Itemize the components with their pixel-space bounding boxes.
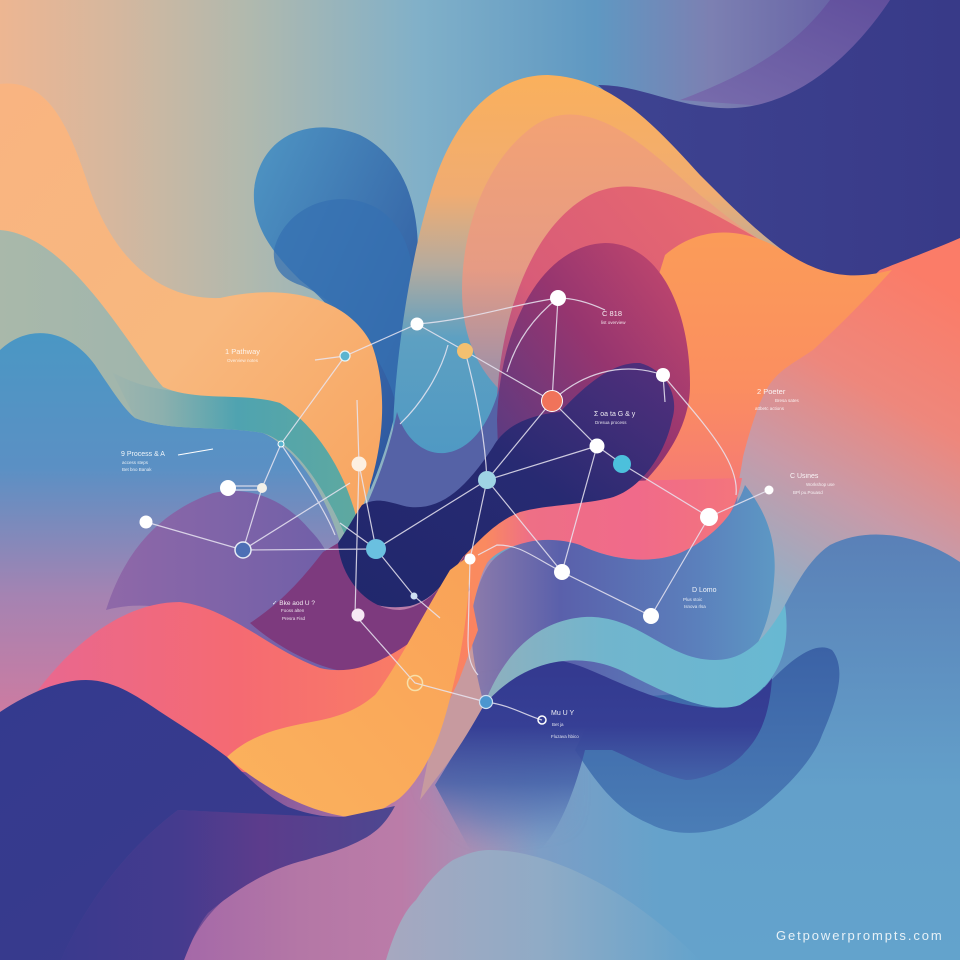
- left blue field: [0, 333, 420, 720]
- watermark: Getpowerprompts.com: [776, 928, 944, 943]
- node: [550, 290, 566, 306]
- network nodes: [140, 290, 774, 724]
- cyan band: [484, 605, 787, 708]
- navy lobe: [435, 660, 772, 850]
- node: [410, 318, 424, 330]
- node: [464, 554, 476, 564]
- node: [366, 539, 386, 559]
- node: [257, 483, 267, 493]
- label: right upper: 2 Poeter: [757, 387, 786, 396]
- label: lower left: ✓ Bke aod U ?: [272, 600, 315, 607]
- label: bottom detail: Bet ja: [552, 722, 564, 727]
- label: centre: Σ oa ta G & y: [594, 411, 636, 418]
- coral wave: [30, 590, 478, 780]
- node: [140, 516, 152, 528]
- label: left detail 2: Bet bno Banak: [122, 467, 152, 472]
- label: right upper detail 2: attbetc actions: [755, 406, 785, 411]
- label: top left: 1 Pathway: [225, 347, 260, 356]
- label: right detail 2: BPl pu.Pouasd: [793, 490, 823, 495]
- node: [352, 608, 364, 622]
- salmon layer: [462, 114, 770, 500]
- blue blob: [254, 127, 418, 490]
- navy core: [338, 363, 674, 607]
- label: lower right detail 2: Isnova rlsa: [684, 604, 706, 609]
- label: left detail: access steps: [122, 460, 149, 465]
- dark plum fold: [250, 543, 470, 672]
- label: bottom: Mu U Y: [551, 710, 575, 717]
- label: lower left detail: Fooss alten: [281, 608, 305, 613]
- blurred navy fade: [435, 700, 560, 825]
- node: [340, 351, 350, 361]
- outer blue lobe: [575, 647, 839, 833]
- node: [542, 390, 562, 412]
- left grey green band: [0, 227, 365, 540]
- top right navy wave: [598, 0, 960, 400]
- node: [278, 441, 284, 447]
- label: right: C Usines: [790, 473, 819, 480]
- node: [656, 368, 670, 382]
- lower right blue wave: [700, 534, 960, 960]
- purple blob left: [106, 491, 345, 680]
- grey pink wedge: [420, 625, 484, 800]
- big yellow wave: [393, 75, 785, 500]
- node: [480, 696, 492, 708]
- mid blue wave: [468, 485, 775, 700]
- mauve lower field: [184, 760, 700, 960]
- label: bottom detail 2: Fluzava hbico: [551, 734, 579, 739]
- label: lower left detail 2: Presra Fisd: [282, 616, 306, 621]
- label: lower right detail: Plus stoic: [683, 597, 703, 602]
- crimson layer: [497, 187, 760, 500]
- orange right lobe: [620, 232, 892, 541]
- label: upper centre detail: list overview: [601, 320, 626, 325]
- slate blue fold behind core: [345, 385, 560, 550]
- node: [352, 456, 366, 472]
- label: lower right: D Lomo: [692, 587, 717, 594]
- node: [457, 343, 473, 359]
- node: [700, 508, 718, 526]
- node: [764, 486, 774, 494]
- node: [613, 455, 631, 473]
- pink wave under core: [420, 478, 742, 625]
- bottom navy wave: [0, 680, 349, 960]
- label: upper centre: C 818: [602, 309, 622, 318]
- peach wave: [0, 84, 382, 520]
- bottom grey blue fold: [386, 850, 700, 960]
- node: [538, 716, 546, 724]
- label: right detail: Workshop use: [806, 482, 835, 487]
- pointer: left label: [178, 449, 213, 455]
- label: left: 9 Process & A: [121, 451, 165, 458]
- label: centre detail: Dresua process: [595, 420, 627, 425]
- network connector lines: [146, 298, 769, 720]
- top right purple swoosh: [680, 0, 960, 120]
- teal ribbon: [112, 372, 362, 535]
- node: [220, 480, 236, 496]
- label: top left detail: Overview notes: [227, 358, 259, 363]
- node: [408, 676, 422, 690]
- node: [590, 438, 604, 454]
- right gradient panel: [730, 238, 960, 780]
- node: [478, 471, 496, 489]
- bottom purple fold: [61, 806, 395, 960]
- node: [410, 592, 418, 600]
- label: right upper detail: Bresa sates: [775, 398, 800, 403]
- node: [643, 608, 659, 624]
- node: [235, 542, 251, 558]
- yellow orange wave: [227, 555, 470, 817]
- node: [554, 564, 570, 580]
- plum oval: [497, 243, 690, 505]
